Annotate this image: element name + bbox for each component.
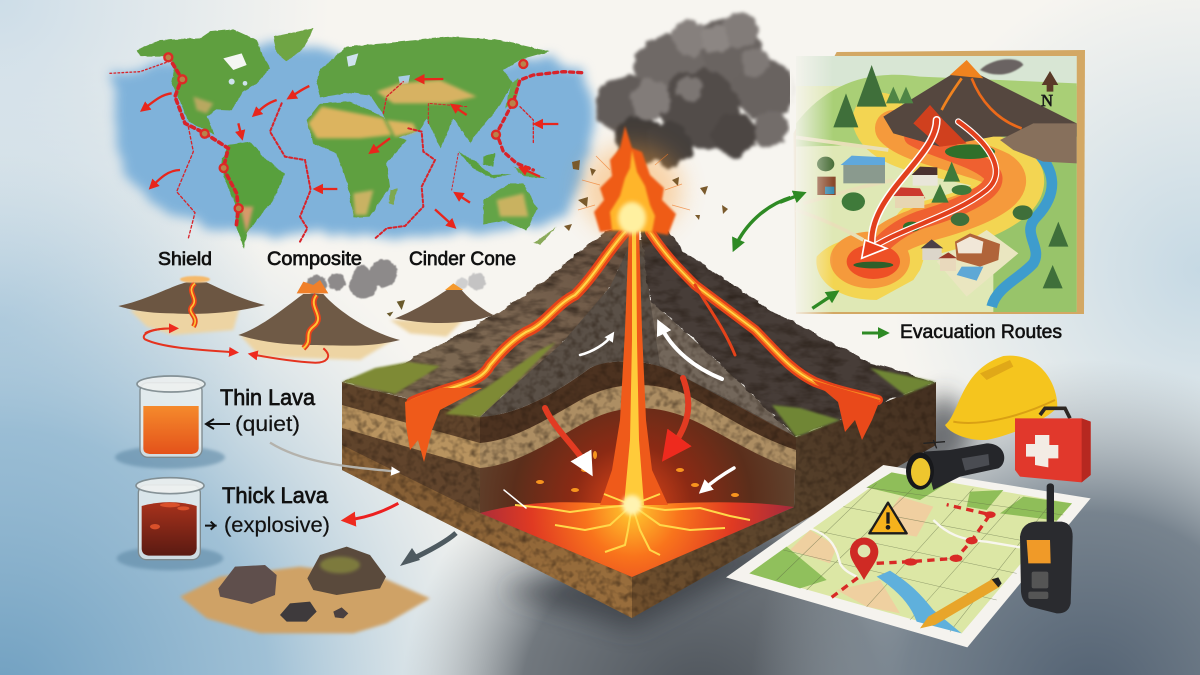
map ocean: [113, 45, 590, 236]
grass left: [342, 342, 556, 417]
sand patch: [180, 567, 430, 633]
pencil: [920, 577, 1002, 628]
flying debris: [564, 160, 728, 231]
tan stratum: [480, 385, 796, 470]
block shadow: [500, 390, 975, 630]
rock: blocky: [218, 565, 277, 604]
first aid kit: [1015, 408, 1091, 482]
continents: [137, 28, 557, 248]
sky: [796, 56, 1077, 86]
panel: safety kit: [726, 356, 1091, 647]
map patches: [749, 472, 1072, 613]
right lava flow: [650, 232, 878, 400]
block right face: [632, 382, 936, 618]
rock: pebble: [333, 607, 348, 618]
heading: Composite: Composite: [267, 249, 362, 270]
walkie talkie: [1020, 483, 1073, 613]
volcano cross-section: [342, 222, 975, 630]
magma veins: [515, 494, 750, 555]
hazard lobe red: [847, 244, 900, 279]
north label: N: [1041, 91, 1053, 110]
erupting volcano: [883, 59, 1077, 163]
grass right: [772, 368, 936, 437]
volcano ring markers: [164, 53, 527, 212]
composite volcano: [238, 280, 400, 348]
small green arrow lower: [812, 293, 835, 308]
sand patches: [130, 307, 463, 360]
panel: lava viscosity: [115, 376, 430, 633]
label: Thick Lava: Thick Lava: [222, 483, 329, 508]
block left face with strata: [342, 382, 632, 618]
roads: [796, 137, 893, 240]
river: [992, 148, 1052, 307]
red dashed route: [832, 505, 990, 597]
panel: evacuation map: [780, 50, 1085, 315]
lava drips left: [405, 388, 482, 462]
label: explosive: (explosive): [224, 514, 330, 537]
lower ground: [993, 160, 1077, 312]
upper dark stratum: [480, 361, 796, 450]
lava fountain: [594, 126, 676, 235]
heading: Shield: Shield: [158, 249, 212, 269]
thin lava beaker: [137, 376, 205, 457]
route waypoints: [904, 511, 996, 566]
hazard connector orange: [870, 225, 923, 260]
dark arrow head: [400, 548, 420, 566]
shield volcano: [118, 276, 265, 327]
plate motion arrows: [143, 79, 558, 226]
rock: mossy: [307, 547, 386, 595]
white flow arrows: [504, 325, 734, 508]
flashlight: [906, 440, 1004, 490]
warning triangle: [869, 503, 907, 533]
map sheet printed area: [749, 472, 1072, 633]
hills: [796, 75, 1077, 147]
paper left fade: [790, 50, 833, 315]
hazard zone red: [873, 137, 993, 258]
dark arrow to rocks: [408, 533, 456, 561]
label: quiet: (quiet): [235, 413, 300, 436]
mountain cut face: [480, 240, 796, 437]
mountain right slope: [640, 225, 936, 437]
chamber sparks: [536, 446, 739, 497]
small green arrow left: [780, 194, 802, 202]
arrow: volcano to map: [735, 197, 792, 247]
pointer: thick lava: [205, 522, 217, 530]
hazard lobe orange: [830, 232, 910, 288]
rock: small: [280, 602, 317, 622]
left lava flow: [412, 232, 625, 402]
map frame: [793, 50, 1085, 314]
magma core glow: [622, 495, 642, 515]
composite volcano smoke: [307, 259, 485, 299]
map sheet: [726, 465, 1091, 647]
hard hat: [945, 356, 1057, 440]
panel: world map of tectonic plates: [110, 28, 590, 248]
grey arrow to block: [270, 443, 397, 472]
map road: [810, 520, 1020, 577]
trees: [817, 65, 1068, 288]
pointer: thin lava: [206, 419, 230, 429]
cinder cone volcano: [387, 283, 493, 323]
chamber back wall: [480, 362, 796, 577]
red circular arrows: [144, 328, 328, 363]
magma chamber floor: [480, 502, 794, 577]
heading: Cinder Cone: Cinder Cone: [409, 249, 516, 270]
hazard zone yellow: [880, 120, 1017, 230]
hazard lobe yellow: [816, 230, 925, 300]
lava fountain glow: [582, 145, 682, 235]
hazard zone orange: [893, 128, 1008, 225]
map paper: [796, 56, 1077, 312]
north arrow: [1042, 71, 1058, 92]
mountain left slope: [342, 222, 632, 417]
eruption sparks: [578, 154, 690, 210]
map river: [877, 571, 962, 633]
central conduit: [600, 228, 668, 505]
evacuation arrows: [862, 120, 996, 258]
cut face right band: [650, 300, 796, 437]
legend arrow: evacuation routes: [862, 332, 885, 334]
map grid: [777, 478, 1063, 632]
deserts: [193, 80, 528, 233]
red flow arrows: [545, 378, 688, 468]
red arrow: [347, 503, 398, 520]
lava drips right: [812, 380, 880, 440]
panel: volcano types: [118, 259, 493, 363]
beaker shadows: [115, 446, 225, 570]
label: Evacuation Routes: Evacuation Routes: [900, 322, 1062, 343]
thick lava beaker: [136, 478, 204, 560]
eruption plume: [595, 12, 795, 167]
conduit core: [624, 228, 644, 505]
houses: [817, 156, 1018, 297]
location pin: [850, 537, 878, 580]
label: Thin Lava: Thin Lava: [220, 385, 316, 410]
ring of fire dashed boundaries: [110, 57, 582, 242]
hudson bay and inland water: [223, 53, 410, 86]
